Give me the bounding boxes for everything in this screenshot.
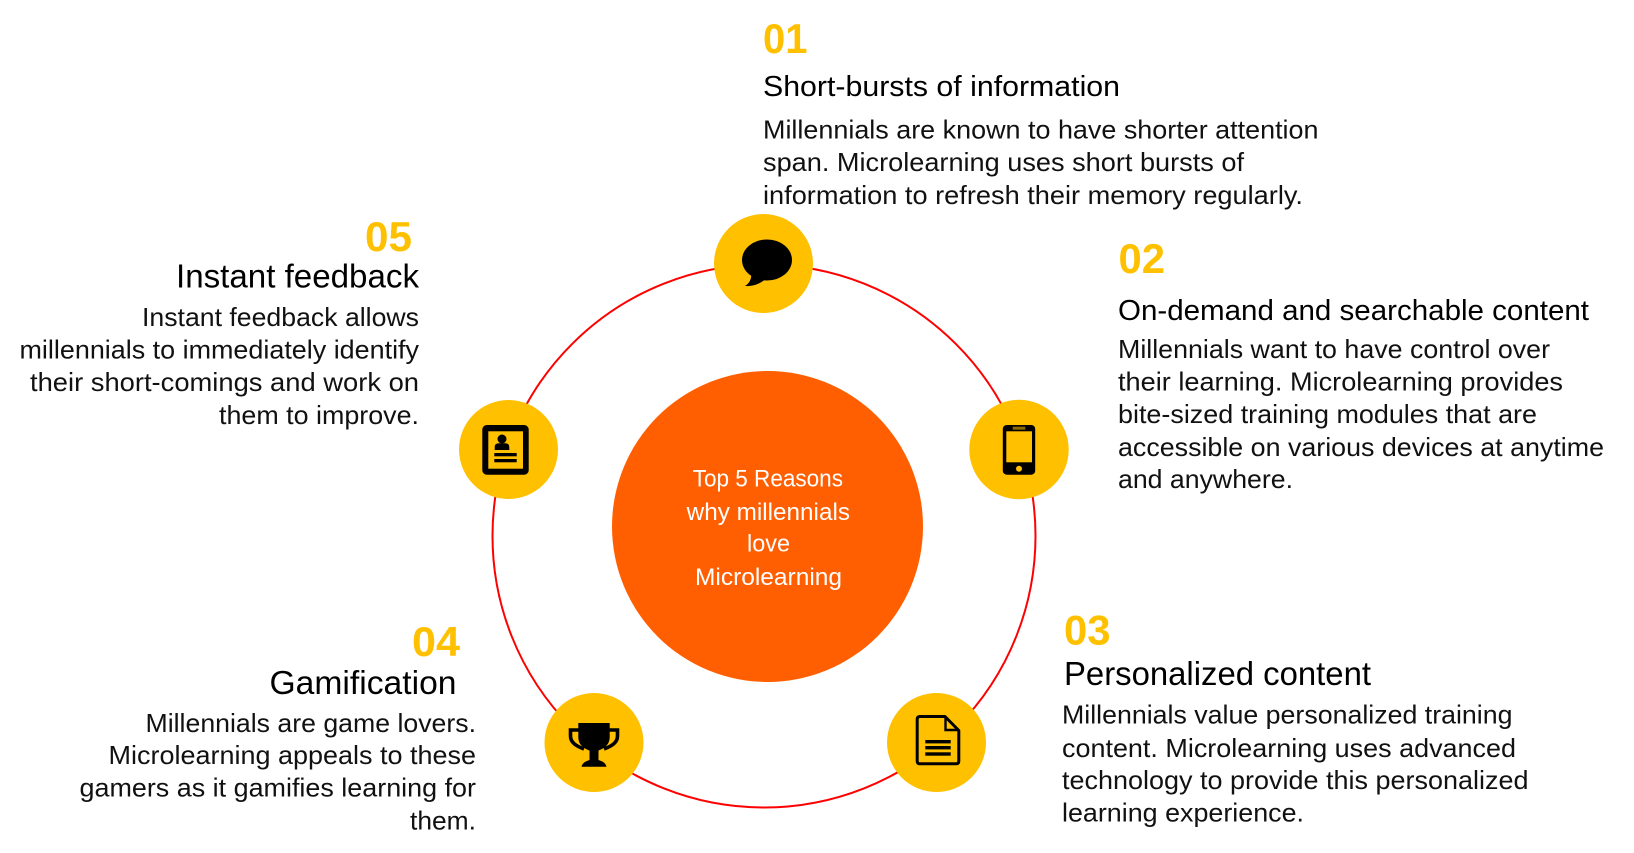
text block 02: bite-sized training modules that are (1118, 399, 1537, 429)
text block 05: Instant feedback allows (142, 302, 419, 332)
ring connecting the five reasons (492, 264, 1036, 808)
text block 04 (80, 708, 476, 836)
text block 03: Millennials value personalized training (1062, 700, 1512, 730)
heading 02: On-demand and searchable content (1118, 295, 1589, 327)
text block 03: technology to provide this personalized (1062, 765, 1528, 795)
text block 02: accessible on various devices at anytime (1118, 432, 1604, 462)
text block 04: gamers as it gamifies learning for (80, 772, 476, 802)
number 05: 05 (365, 213, 412, 260)
icon: smartphone (969, 400, 1069, 499)
icon: trophy (544, 693, 644, 792)
panel: reason 03 (1062, 606, 1528, 828)
icon: profile card (459, 400, 558, 499)
text block 02: their learning. Microlearning provides (1118, 366, 1563, 396)
text block 01: Millennials are known to have shorter attention (763, 114, 1318, 144)
text block 02: Millennials want to have control over (1118, 334, 1550, 364)
title: Top 5 Reasons (693, 466, 843, 493)
text block 04: them. (410, 806, 476, 836)
heading 01: Short-bursts of information (763, 71, 1120, 103)
heading 05: Instant feedback (176, 258, 419, 294)
number 02: 02 (1118, 235, 1165, 282)
title: love (747, 530, 790, 558)
text block 05: millennials to immediately identify (20, 334, 419, 364)
title (686, 466, 850, 591)
number 01: 01 (763, 15, 808, 62)
text block 04: Microlearning appeals to these (108, 740, 476, 770)
text block 03 (1062, 700, 1528, 828)
text block 05: their short-comings and work on (30, 367, 419, 397)
panel: reason 04 (80, 618, 476, 836)
text block 01 (763, 114, 1318, 210)
icon: speech bubble (714, 214, 813, 313)
panel: reason 02 (1118, 235, 1604, 494)
panel: reason 01 (763, 15, 1318, 210)
heading 04: Gamification (270, 664, 456, 701)
text block 05: them to improve. (219, 400, 419, 430)
text block 02: and anywhere. (1118, 464, 1293, 494)
text block 03: content. Microlearning uses advanced (1062, 733, 1516, 763)
text block 03: learning experience. (1062, 798, 1304, 828)
panel: reason 05 (20, 213, 419, 430)
icon: document (887, 693, 986, 792)
text block 02 (1118, 334, 1604, 494)
title: Microlearning (695, 564, 842, 591)
number 03: 03 (1064, 606, 1110, 654)
number 04: 04 (412, 618, 461, 665)
text block 01: information to refresh their memory regularly. (763, 180, 1303, 210)
central circle with title (612, 371, 923, 682)
title: why millennials (686, 499, 850, 526)
heading 03: Personalized content (1064, 655, 1371, 692)
text block 04: Millennials are game lovers. (146, 708, 476, 738)
text block 05 (20, 302, 419, 430)
text block 01: span. Microlearning uses short bursts of (763, 147, 1245, 177)
